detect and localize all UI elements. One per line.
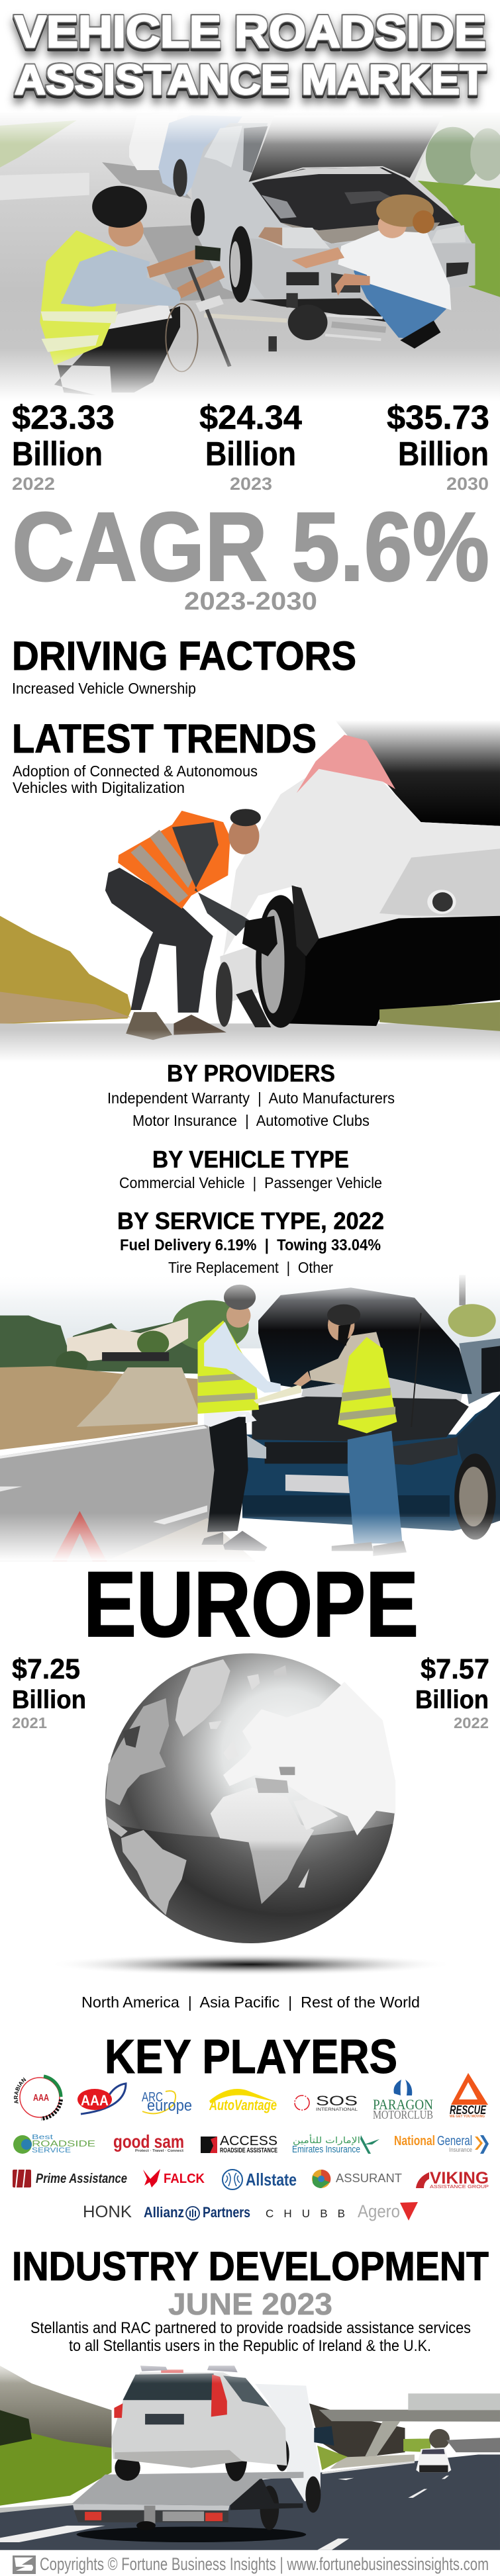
logo: SOS International: SOS [316,2093,358,2109]
segment: by providers: Motor Insurance | Automotive Clubs [132,1112,370,1129]
stat: 2022 market value: $23.33 [12,398,115,436]
stat: Europe 2022: $7.57 [421,1653,489,1685]
icon: Fortune Business Insights logo [13,2555,36,2574]
logo: AAA: AAA [81,2092,109,2109]
segment: by service type: BY SERVICE TYPE, 2022 [117,1207,384,1234]
far white car [416,2448,451,2472]
logo: AAA [77,2084,126,2114]
logo: Emirates Insurance [292,2134,379,2155]
heading: key players: KEY PLAYERS [105,2031,397,2084]
logo: Access Roadside Assistance: ACCESS [220,2134,277,2148]
logo: Emirates Insurance: Emirates Insurance [292,2144,360,2155]
logo: Emirates Insurance: الإمارات للتأمين [293,2134,360,2146]
silver car [191,123,475,299]
logo: Rescue: WE GET YOU MOVING [450,2115,485,2119]
stat: Europe 2021: Billion [12,1686,86,1714]
logo: Allianz Partners [144,2204,250,2221]
stat: 2030 market value: Billion [398,435,489,473]
logo: Honk: HONK [83,2203,132,2221]
man with clipboard [197,1285,301,1551]
logo: National General [394,2134,489,2154]
logo: National General: National [394,2134,435,2148]
logo: Good Sam: good sam [113,2131,184,2152]
title: ASSISTANCE MARKET [15,57,486,103]
logo: Agero: Agero [358,2201,400,2221]
white car [129,113,179,170]
stat: 2022 market value [12,398,115,494]
logo: Viking Assistance Group: VIKING [430,2169,489,2187]
logo: Assurant: ASSURANT [336,2172,402,2185]
logo: ARC Europe: ARC [142,2090,163,2105]
stat: Europe 2022: Billion [415,1686,489,1714]
logo: Allstate [223,2170,297,2189]
stat: 2023 market value: Billion [205,435,296,473]
trends text [13,762,258,796]
globe shadow [48,1953,453,1976]
logo: Best Roadside Service: SERVICE [32,2146,71,2154]
segment: by vehicle type [119,1146,382,1191]
stat: 2030 market value [387,398,489,494]
logo: Rescue [450,2073,488,2119]
segment: by providers: Independent Warranty | Auto Manufacturers [107,1089,395,1107]
segment: by vehicle type: BY VEHICLE TYPE [152,1146,349,1173]
logo: Best Roadside Service: Best [32,2134,53,2141]
stat: 2023 market value: $24.34 [199,398,303,436]
driving factor text: Increased Vehicle Ownership [12,680,196,697]
icon: globe [99,1653,404,1953]
segment: by service type [117,1207,384,1276]
logo: Paragon Motorclub: MOTORCLUB [373,2108,433,2121]
service photo: mechanics at car [0,1272,500,1561]
logo: SOS International: INTERNATIONAL [316,2108,358,2112]
hero photo: roadside breakdown [0,110,500,411]
stat: Europe 2021: $7.25 [12,1653,80,1685]
segment: by vehicle type: Commercial Vehicle | Passenger Vehicle [119,1174,382,1191]
mechanic with vest [54,306,180,395]
development date: JUNE 2023 [168,2287,332,2321]
tow truck [72,2384,334,2542]
logo: Access Roadside Assistance [201,2134,277,2154]
man on phone [293,1305,407,1556]
CAGR period: 2023-2030 [184,588,317,616]
logo: Falck [143,2169,205,2187]
blue car [242,1399,500,1531]
stat: 2023 market value [199,398,303,494]
trends text: Adoption of Connected & Autonomous [13,762,258,780]
logo: Good Sam: Protect · Travel · Connect [135,2149,183,2153]
development text: to all Stellantis users in the Republic of Ireland & the U.K. [69,2337,431,2355]
stat: 2022 market value: Billion [12,435,103,473]
silver car on flatbed [112,2366,289,2481]
logo: Allianz Partners: Allianz [144,2204,184,2221]
title [15,7,486,103]
stat: 2030 market value: $35.73 [387,398,489,436]
logo: Prime Assistance [13,2170,127,2187]
segment: by providers: BY PROVIDERS [167,1060,335,1087]
tow truck photo [0,2357,500,2550]
logo: Chubb: CHUBB [266,2207,345,2220]
logo: Allianz Partners: Partners [203,2204,250,2221]
logo: Rescue: RESCUE [450,2103,487,2117]
stat: Europe 2021: 2021 [12,1714,47,1731]
development text [30,2319,471,2355]
logo: Paragon Motorclub: PARAGON [373,2096,433,2113]
logo: Assurant [312,2170,402,2188]
segment: by providers [107,1060,395,1129]
trends photo: tire change [0,720,500,1064]
other regions: North America | Asia Pacific | Rest of the World [81,1994,420,2011]
warning triangle [52,1511,107,1561]
stat: Europe 2022: 2022 [454,1714,489,1731]
logo: National General: Insurance [449,2146,472,2153]
logo: National General: General [437,2134,472,2148]
logo: Arabian Automobile Association [14,2074,63,2121]
segment: by service type: Fuel Delivery 6.19% | Towing 33.04% [120,1236,381,1254]
logo: AutoVantage: AutoVantage [209,2097,277,2113]
stat: Europe 2021 [12,1653,86,1731]
stat: 2023 market value: 2023 [230,474,272,494]
woman [354,261,446,339]
logo: Viking Assistance Group: ASSISTANCE GROUP [430,2185,489,2189]
logo: Best Roadside Service [13,2134,95,2154]
logo: ARC Europe: europe [147,2097,192,2115]
logo: Access Roadside Assistance: ROADSIDE ASSISTANCE [220,2147,277,2154]
heading: latest trends: LATEST TRENDS [12,716,317,761]
stat: 2030 market value: 2030 [446,474,489,494]
logo: SOS International [295,2093,358,2112]
logo: Arabian Automobile Association: ARABIAN [14,2077,26,2103]
logo: Best Roadside Service: ROADSIDE [32,2139,95,2148]
stat: Europe 2022 [415,1653,489,1731]
logo: Arabian Automobile Association: AAA [33,2092,49,2103]
mechanic [105,809,277,1040]
segment: by service type: Tire Replacement | Other [168,1259,333,1276]
logo: Prime Assistance: Prime Assistance [36,2172,127,2186]
stat: 2022 market value: 2022 [12,474,55,494]
blue car [158,115,242,197]
logo: AutoVantage [209,2089,277,2113]
logo: Falck: FALCK [164,2172,205,2186]
logo: Allstate: Allstate [246,2170,297,2189]
heading: Europe: EUROPE [83,1552,419,1656]
bicycle [166,267,386,371]
title: VEHICLE ROADSIDE [15,7,486,57]
logo: Paragon Motorclub [373,2080,433,2121]
trends text: Vehicles with Digitalization [13,779,185,796]
logo: ARC Europe [142,2090,192,2115]
heading: driving factors: DRIVING FACTORS [12,633,356,678]
